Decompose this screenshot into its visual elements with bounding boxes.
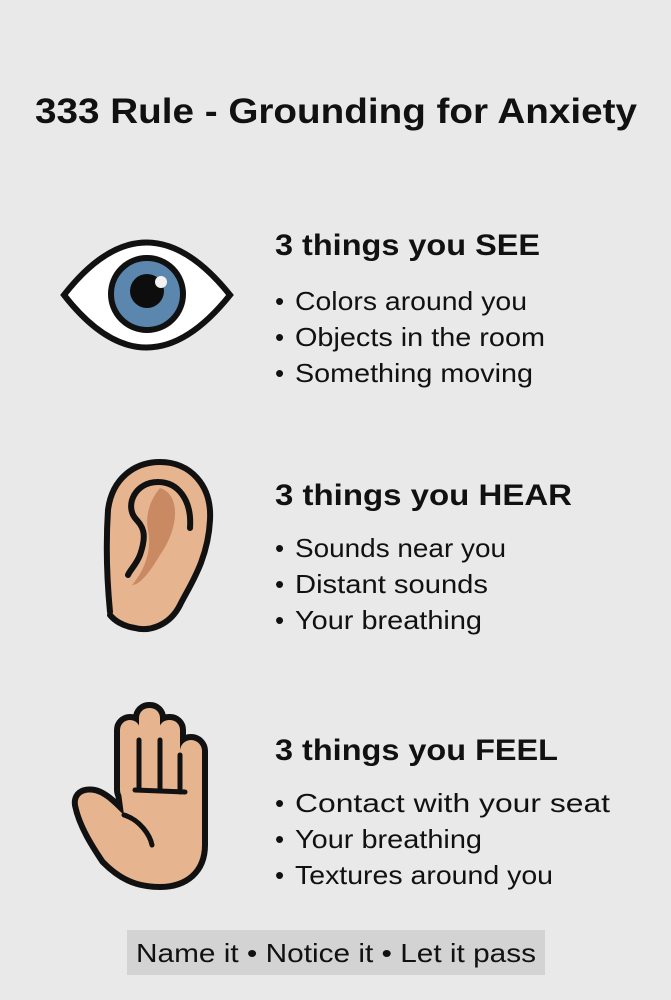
bullet list: feel: • (275, 788, 284, 818)
bullet list: see (275, 286, 545, 388)
panel: hear (275, 479, 572, 635)
heading: hear: 3 things you HEAR (275, 479, 572, 512)
panel: see (275, 229, 545, 388)
bullet list: hear: • (275, 533, 284, 563)
bullet list: see: Something moving (295, 358, 533, 388)
footer banner (127, 930, 545, 975)
bullet list: see: Objects in the room (295, 322, 545, 352)
footer banner: Name it • Notice it • Let it pass (136, 938, 536, 968)
bullet list: hear: Distant sounds (295, 569, 488, 599)
icon: eye (64, 242, 230, 348)
heading: see: 3 things you SEE (275, 229, 540, 262)
bullet list: hear: Your breathing (295, 605, 482, 635)
bullet list: hear: • (275, 605, 284, 635)
icon: ear (107, 462, 210, 629)
bullet list: see: Colors around you (295, 286, 527, 316)
bullet list: feel (275, 788, 611, 890)
title: 333 Rule - Grounding for Anxiety (35, 92, 638, 131)
bullet list: feel: Textures around you (295, 860, 553, 890)
bullet list: feel: Contact with your seat (295, 788, 611, 818)
bullet list: see: • (275, 286, 284, 316)
bullet list: feel: Your breathing (295, 824, 482, 854)
panel: feel (275, 734, 611, 890)
bullet list: feel: • (275, 824, 284, 854)
heading: feel: 3 things you FEEL (275, 734, 558, 767)
bullet list: hear: • (275, 569, 284, 599)
bullet list: see: • (275, 322, 284, 352)
bullet list: hear: Sounds near you (295, 533, 506, 563)
bullet list: hear (275, 533, 506, 635)
bullet list: see: • (275, 358, 284, 388)
bullet list: feel: • (275, 860, 284, 890)
icon: hand (78, 708, 202, 884)
